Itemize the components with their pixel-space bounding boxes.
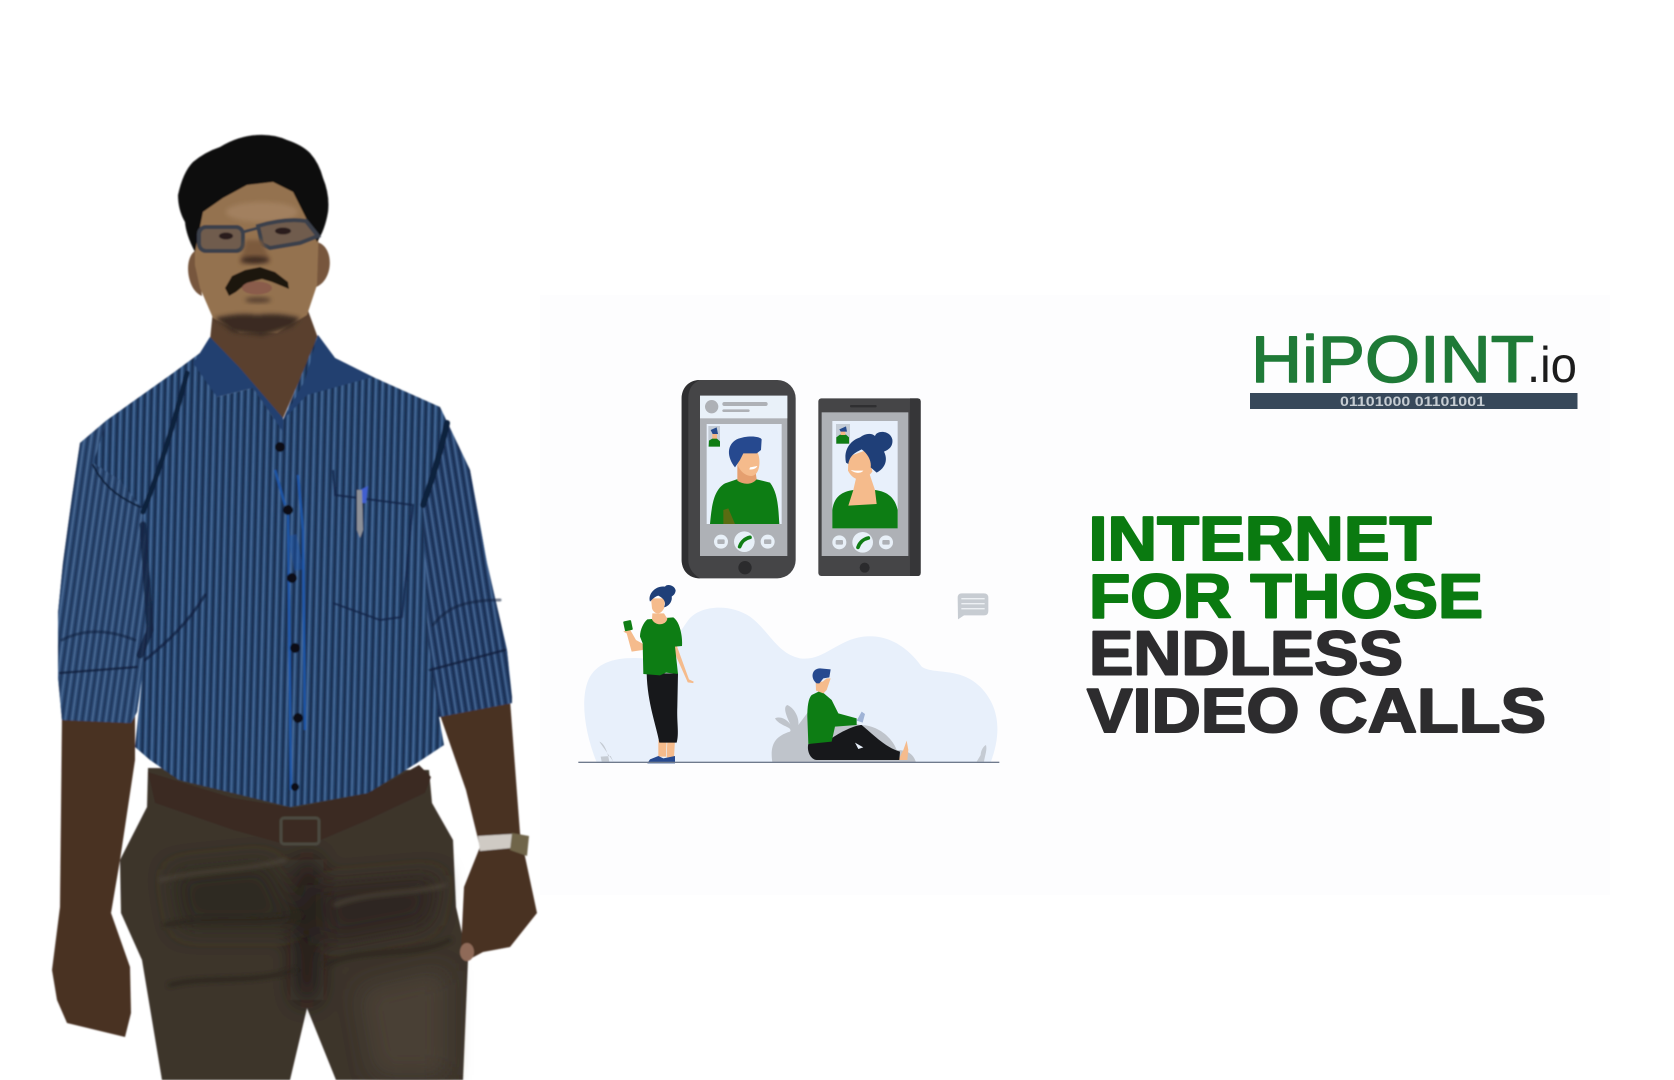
background blob — [584, 608, 997, 762]
plant: left — [599, 742, 613, 762]
mini caller — [836, 424, 850, 444]
headline line 2: FOR THOSE — [1089, 562, 1483, 632]
glasses — [199, 220, 318, 251]
nostrils — [241, 256, 269, 264]
standing woman — [623, 585, 693, 763]
shirt pocket — [333, 470, 413, 620]
headline line 3: ENDLESS — [1089, 620, 1403, 688]
nose — [240, 240, 270, 264]
woman on screen — [832, 432, 898, 528]
plant: right — [977, 745, 986, 762]
moustache — [225, 267, 289, 296]
collar — [193, 337, 283, 432]
logo wordmark: HiPOINT — [1251, 322, 1534, 396]
shirt torso — [58, 335, 512, 807]
headline line 1: INTERNET — [1088, 505, 1432, 574]
presenter photo — [52, 135, 537, 1080]
shirt buttons — [275, 442, 303, 791]
forehead highlight — [226, 202, 298, 222]
headline line 4: VIDEO CALLS — [1087, 677, 1546, 746]
shirt placket — [275, 470, 305, 790]
call buttons — [714, 531, 775, 552]
seated man — [807, 668, 908, 760]
left sleeve — [58, 420, 150, 723]
phone: right — [818, 398, 921, 576]
illustration: video call — [578, 380, 999, 763]
face — [195, 165, 320, 333]
ears — [188, 242, 330, 296]
panel: faint slide background — [540, 295, 1610, 895]
trouser shading — [170, 860, 445, 1075]
headline — [1087, 505, 1546, 746]
ground line — [578, 762, 999, 763]
bush behind seated man — [772, 705, 916, 762]
right arm — [440, 700, 537, 960]
trousers — [120, 768, 468, 1080]
belt — [148, 765, 431, 843]
thumb — [460, 943, 474, 961]
hair — [178, 135, 328, 252]
shirt fold shadows — [60, 373, 505, 673]
lips — [242, 282, 272, 294]
logo: HiPOINT.io — [1250, 322, 1578, 409]
logo bar — [1250, 393, 1578, 409]
belt buckle — [281, 818, 319, 844]
man on screen — [710, 436, 779, 524]
wrist watch — [478, 833, 529, 856]
call buttons — [832, 532, 893, 553]
logo suffix: .io — [1527, 337, 1577, 393]
phone: left — [682, 380, 796, 578]
neck — [210, 305, 318, 425]
left arm — [52, 715, 135, 1037]
trouser creases — [160, 860, 450, 985]
beard — [215, 314, 300, 336]
right sleeve — [423, 407, 512, 717]
mini caller — [708, 426, 720, 447]
icon: chat bubble — [958, 593, 988, 619]
logo binary text: 01101000 01101001 — [1340, 393, 1485, 409]
pen — [357, 486, 368, 538]
